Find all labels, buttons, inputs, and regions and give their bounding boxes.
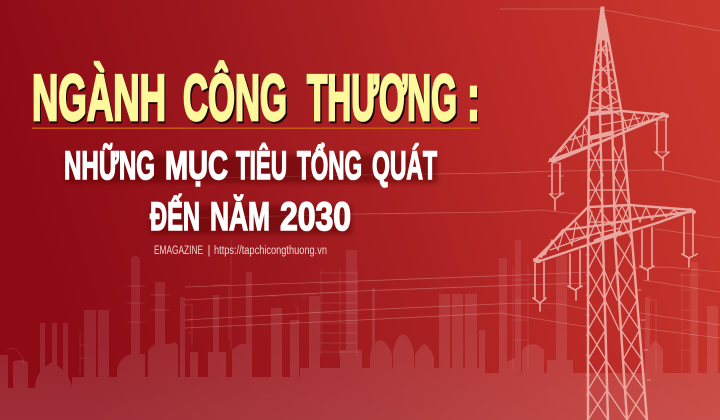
subtitle lines: MỤC — [165, 144, 228, 188]
transmission tower — [533, 7, 697, 420]
source byline — [154, 245, 327, 257]
title: main heading: NGÀNH — [32, 61, 166, 134]
subtitle lines: NHỮNG — [64, 142, 155, 188]
subtitle lines: 2030 — [280, 195, 351, 239]
subtitle lines — [64, 141, 437, 239]
subtitle lines: QUÁT — [372, 143, 437, 188]
title block — [32, 61, 481, 257]
source byline: | — [208, 245, 210, 257]
title shadow: CÔNG — [184, 63, 288, 136]
lower insulators — [533, 214, 697, 311]
source byline: https://tapchicongthuong.vn — [214, 245, 327, 257]
source byline: EMAGAZINE — [154, 245, 203, 257]
title shadow: THƯƠNG — [308, 63, 458, 136]
mast bracing — [586, 40, 651, 420]
title: main heading: CÔNG — [183, 61, 287, 134]
title: main heading — [32, 61, 480, 134]
title: main heading: : — [467, 61, 480, 134]
lower cross-arm — [535, 205, 694, 262]
title shadow: : — [468, 63, 481, 136]
title shadow: NGÀNH — [33, 63, 167, 136]
title shadow — [33, 63, 481, 136]
power lines — [185, 9, 720, 338]
subtitle lines: TIÊU — [236, 142, 287, 188]
upper insulators — [548, 118, 669, 210]
upper cross-arm — [551, 111, 667, 162]
title underline — [32, 128, 480, 129]
title: main heading: THƯƠNG — [307, 61, 457, 134]
subtitle lines: NĂM — [210, 194, 270, 239]
subtitle lines: ĐẾN — [150, 193, 200, 239]
tower mast legs — [588, 7, 647, 420]
industrial skyline silhouette — [0, 240, 720, 420]
subtitle lines: TỔNG — [297, 141, 362, 188]
skyline scaffolding — [7, 240, 702, 375]
subtitle glow — [64, 155, 437, 234]
